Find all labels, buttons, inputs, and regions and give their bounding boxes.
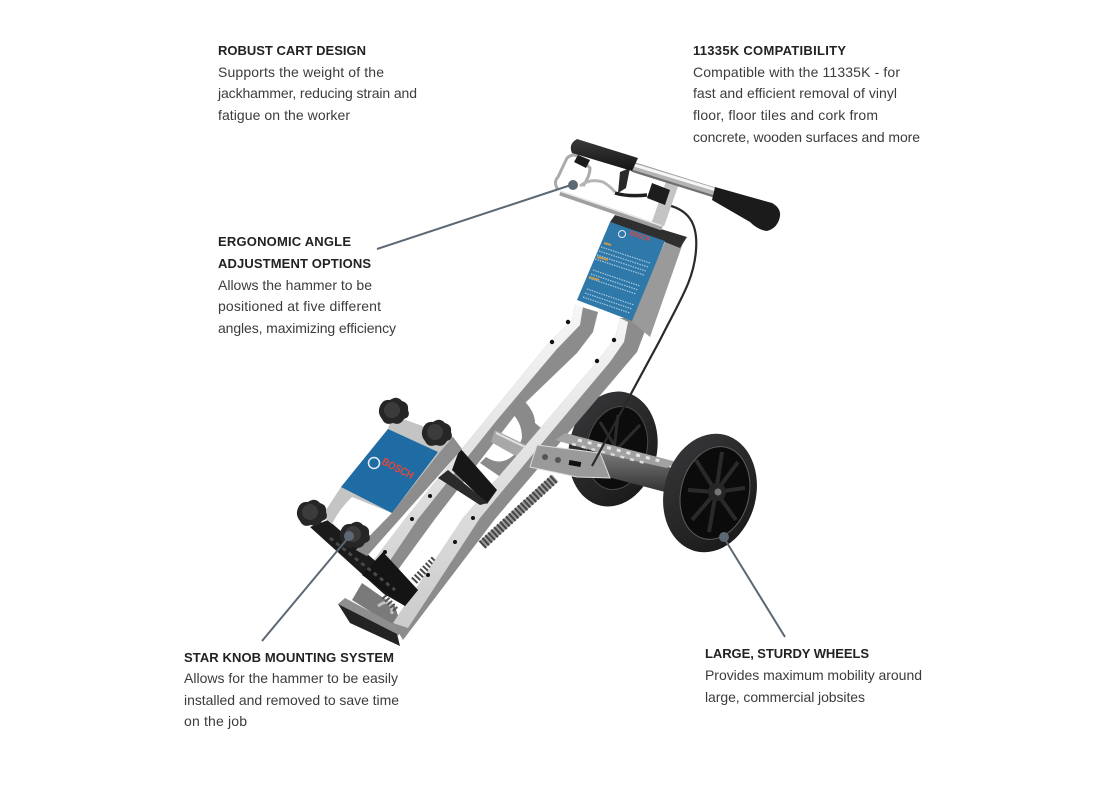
handlebar [571, 139, 780, 231]
carriage plate [322, 415, 462, 556]
leader line: wheels [719, 532, 785, 637]
blue label [341, 429, 438, 513]
text: large sturdy wheels [705, 646, 922, 705]
lower clamp block [310, 520, 418, 606]
text: 11335K compatibility [693, 43, 920, 145]
star knobs [297, 398, 452, 548]
text: ergonomic angle adjustment: angles, maximizing efficiency [218, 320, 396, 336]
cable [592, 204, 696, 466]
handle frame [556, 155, 672, 228]
text: ergonomic angle adjustment [218, 234, 396, 336]
text: ergonomic angle adjustment: ERGONOMIC ANGLE [218, 234, 351, 249]
axle beam and step [530, 433, 677, 492]
text: star knob mounting system: Allows for the hammer to be easily [184, 670, 398, 686]
text: star knob mounting system: installed and removed to save time [184, 692, 399, 708]
text: robust cart design: ROBUST CART DESIGN [218, 43, 366, 58]
rail holes [383, 320, 616, 577]
text: robust cart design: jackhammer, reducing strain and [217, 85, 417, 101]
rear wheel [558, 383, 668, 515]
left rail [370, 305, 598, 578]
text: star knob mounting system: on the job [184, 713, 247, 729]
front wheel [651, 424, 769, 562]
text: large sturdy wheels: LARGE, STURDY WHEELS [705, 646, 869, 661]
text: robust cart design: fatigue on the worker [218, 107, 350, 123]
text: star knob mounting system: STAR KNOB MOUNTING SYSTEM [184, 650, 394, 665]
instruction panel: BOSCH [628, 230, 651, 243]
leader line: ergonomic angle [377, 180, 578, 249]
text: star knob mounting system [184, 650, 399, 729]
text: robust cart design [217, 43, 417, 123]
text: ergonomic angle adjustment: positioned at five different [218, 298, 381, 314]
text: ergonomic angle adjustment: Allows the hammer to be [218, 277, 372, 293]
text: large sturdy wheels: Provides maximum mobility around [705, 667, 922, 683]
spring [482, 478, 555, 545]
lower spring [414, 558, 436, 581]
text: 11335K compatibility: Compatible with the 11335K - for [693, 64, 900, 80]
right rail [393, 318, 650, 640]
blue label: BOSCH [380, 456, 415, 482]
text: ergonomic angle adjustment: ADJUSTMENT OPTIONS [218, 256, 371, 271]
text: large sturdy wheels: large, commercial jobsites [705, 689, 865, 705]
text: 11335K compatibility: 11335K COMPATIBILITY [693, 43, 846, 58]
product: floor stripper cart [297, 139, 780, 646]
text: 11335K compatibility: concrete, wooden surfaces and more [693, 129, 920, 145]
instruction panel [577, 215, 687, 337]
leader line: star knob [262, 531, 354, 641]
text: robust cart design: Supports the weight of the [218, 64, 384, 80]
upper clamp block [438, 448, 497, 505]
angle adjustment bracket [480, 397, 541, 478]
text: 11335K compatibility: floor, floor tiles and cork from [693, 107, 878, 123]
text: 11335K compatibility: fast and efficient removal of vinyl [693, 85, 897, 101]
foot plate [338, 583, 405, 646]
